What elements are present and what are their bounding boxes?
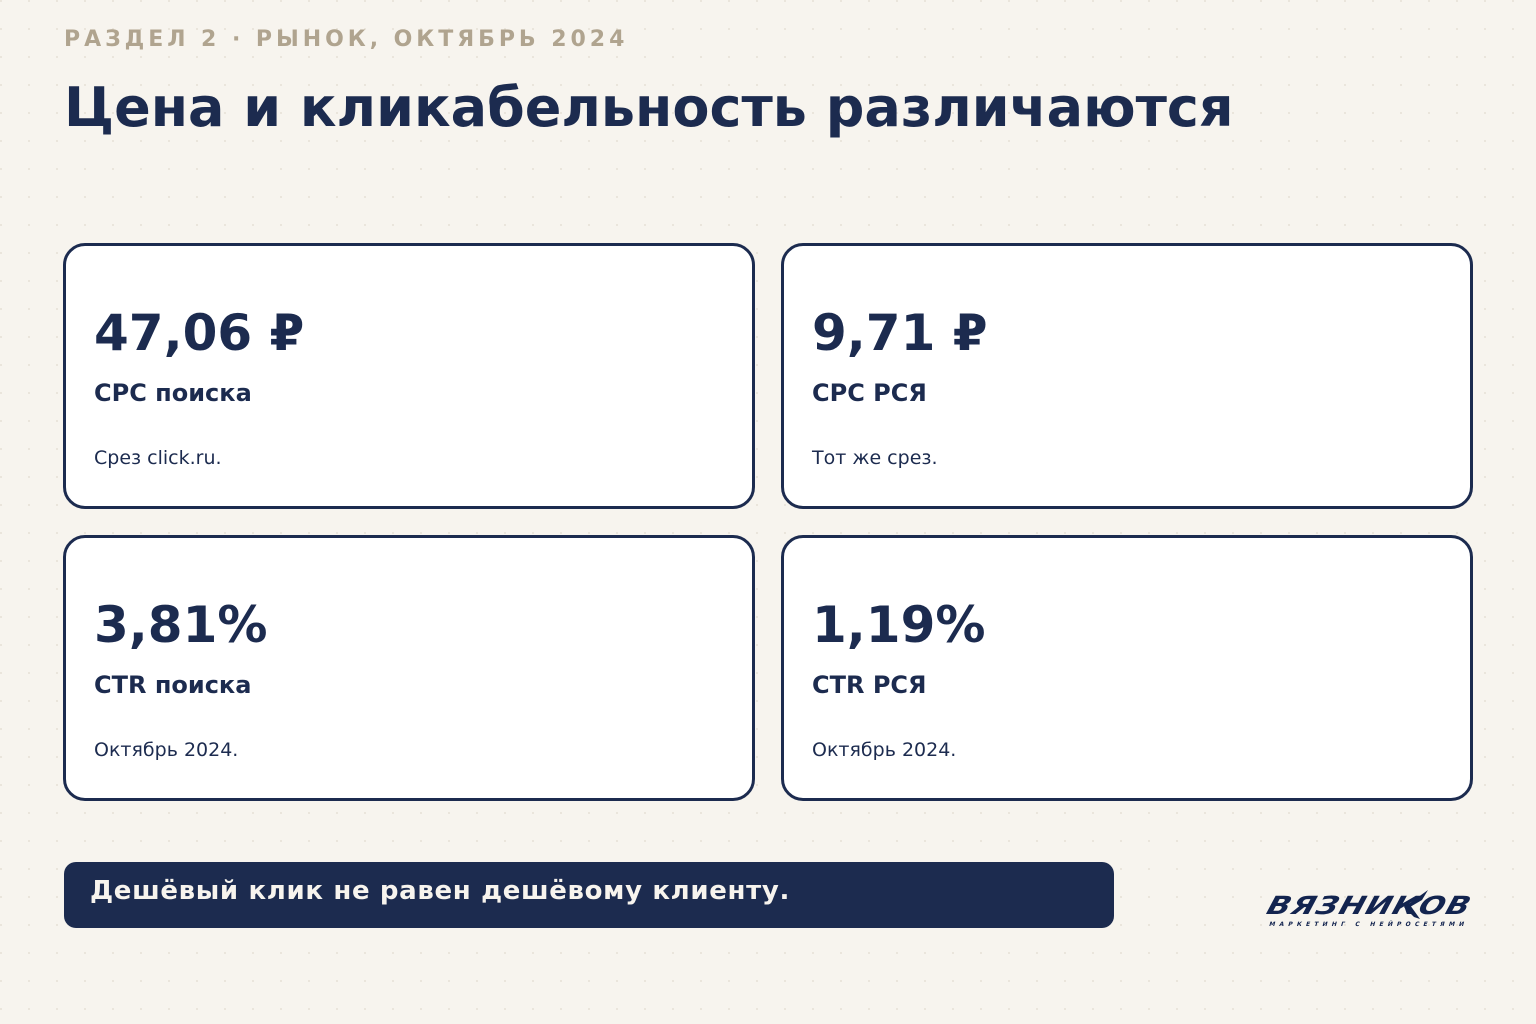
eyebrow: РАЗДЕЛ 2 · РЫНОК, ОКТЯБРЬ 2024 — [64, 27, 628, 52]
value: CTR RSYA: 1,19% — [812, 596, 985, 654]
note: CTR search: Октябрь 2024. — [94, 739, 238, 761]
title: Цена и кликабельность различаются — [64, 76, 1234, 139]
note: CPC RSYA: Тот же срез. — [812, 447, 938, 469]
logo wordmark: ВЯЗНИКОВ — [1260, 891, 1479, 920]
label: CTR search: CTR поиска — [94, 671, 251, 699]
panel: CTR RSYA — [781, 535, 1473, 801]
value: CPC search: 47,06 ₽ — [94, 304, 304, 362]
panel: CTR search — [63, 535, 755, 801]
value: CPC RSYA: 9,71 ₽ — [812, 304, 988, 362]
callout bar — [64, 862, 1114, 928]
logo — [1260, 890, 1479, 928]
label: CPC RSYA: CPC РСЯ — [812, 379, 927, 407]
callout text: Дешёвый клик не равен дешёвому клиенту. — [90, 876, 790, 906]
logo tagline: МАРКЕТИНГ С НЕЙРОСЕТЯМИ — [1268, 921, 1469, 928]
logo K swoosh — [1404, 890, 1428, 919]
panel: CPC search — [63, 243, 755, 509]
note: CTR RSYA: Октябрь 2024. — [812, 739, 956, 761]
panel: CPC RSYA — [781, 243, 1473, 509]
note: CPC search: Срез click.ru. — [94, 447, 222, 469]
label: CPC search: CPC поиска — [94, 379, 252, 407]
value: CTR search: 3,81% — [94, 596, 267, 654]
label: CTR RSYA: CTR РСЯ — [812, 671, 927, 699]
